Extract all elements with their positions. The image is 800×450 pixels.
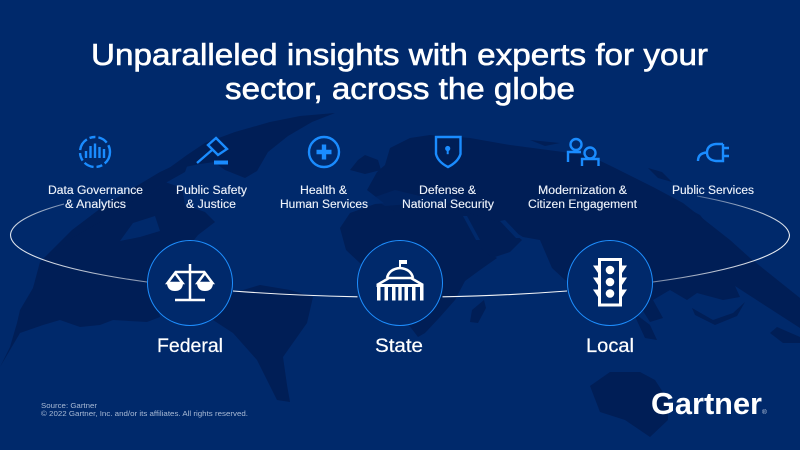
title: sector, across the globe (225, 71, 575, 106)
label: Citizen Engagement (528, 199, 638, 211)
icon: people (568, 139, 598, 166)
icon: gavel (197, 138, 228, 164)
label: Defense & (419, 185, 476, 197)
label (48, 185, 143, 211)
icon: capitol (376, 260, 424, 300)
label: Human Services (280, 199, 368, 211)
label: Local (586, 336, 634, 357)
label: & Analytics (65, 199, 126, 211)
label (402, 185, 494, 211)
tier: State (358, 240, 442, 357)
label: Public Services (672, 185, 754, 197)
badge: Local (568, 240, 652, 326)
sector: Public Services (672, 144, 754, 197)
icon: traffic light (593, 260, 627, 305)
title: Unparalleled insights with experts for your (91, 37, 708, 72)
label (528, 185, 638, 211)
label: & Justice (186, 199, 236, 211)
orbit ring (10, 196, 790, 297)
sector: Modernization & Citizen Engagement (528, 139, 638, 211)
map: Indonesia and Philippines (692, 302, 745, 325)
source note (41, 401, 248, 418)
source note: Source: Gartner (41, 401, 98, 410)
map: Madagascar (470, 300, 486, 323)
badge: State (358, 240, 442, 326)
label: Data Governance (48, 185, 143, 197)
map: Africa (340, 202, 497, 337)
logo: Gartner: ® (762, 408, 767, 416)
sector: Data Governance & Analytics (48, 137, 143, 211)
world map (0, 113, 800, 437)
sector: Defense & National Security (402, 137, 494, 211)
map: Sumatra and Malay (633, 312, 657, 340)
map: Eurasia (367, 135, 800, 328)
label: Modernization & (538, 185, 627, 197)
map: Arabian Peninsula (465, 212, 522, 258)
source note: © 2022 Gartner, Inc. and/or its affiliates. All rights reserved. (41, 409, 248, 418)
label (280, 185, 368, 211)
label: State (375, 336, 423, 357)
tier: Local (568, 240, 652, 357)
map: North America (0, 182, 215, 367)
map: South America (213, 285, 313, 402)
icon: shield (436, 137, 460, 167)
label: National Security (402, 199, 494, 211)
icon: medical cross (309, 137, 339, 167)
map: Red Sea (463, 216, 480, 240)
logo: Gartner: Gartner (651, 386, 762, 421)
label: Federal (157, 336, 223, 357)
label: Public Safety (176, 185, 247, 197)
title (91, 37, 708, 106)
badge: Federal (148, 240, 232, 326)
sector: Health & Human Services (280, 137, 368, 211)
map: Greenland (165, 113, 335, 178)
map: Canadian islands (33, 158, 190, 288)
icon: scales (167, 264, 213, 300)
icon: plug (698, 144, 729, 161)
sector: Public Safety & Justice (176, 138, 247, 211)
map: Australia (590, 372, 668, 437)
tier: Federal (148, 240, 232, 357)
label (176, 185, 247, 211)
icon: data analytics ring (80, 137, 110, 167)
label: Health & (300, 185, 347, 197)
map: British Isles (350, 155, 381, 174)
map: Persian Gulf (500, 220, 522, 238)
map: Mediterranean Sea (372, 190, 458, 206)
map: New Guinea (770, 327, 800, 343)
map: Arctic islands (530, 140, 704, 220)
